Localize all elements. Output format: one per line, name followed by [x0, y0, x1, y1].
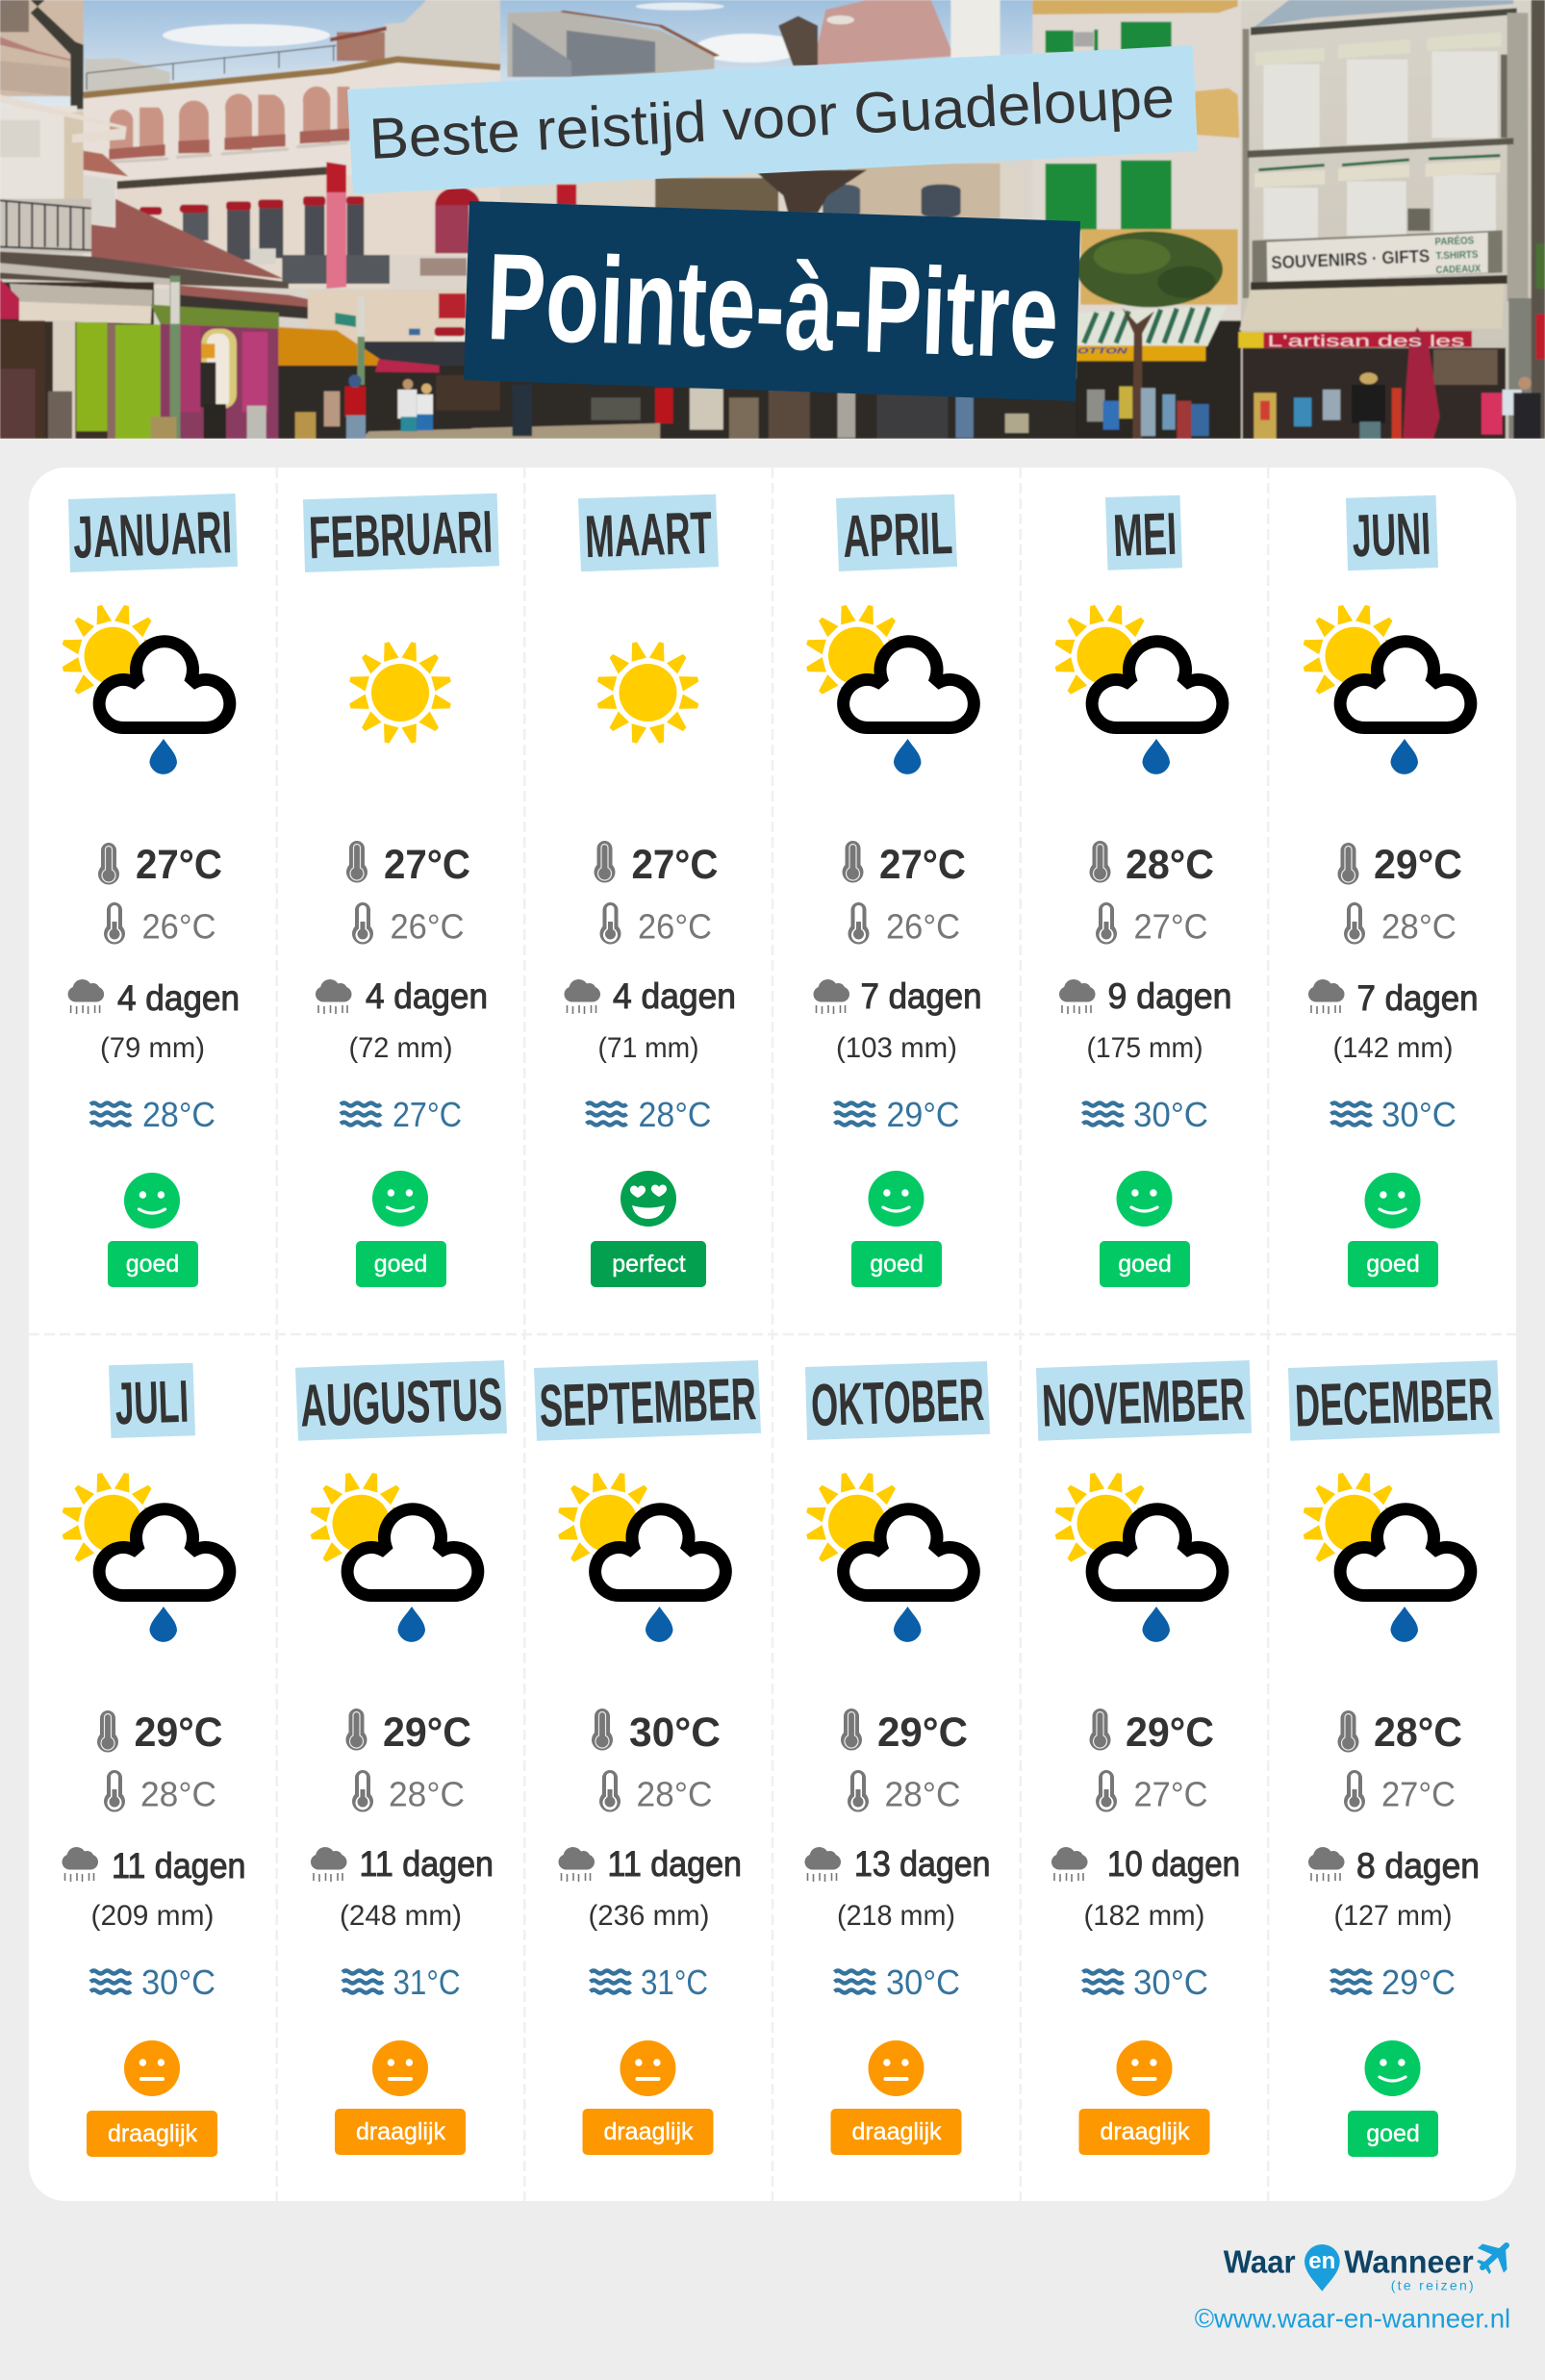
header photo: street of Pointe-à-Pitre [0, 0, 1545, 439]
sea temperature: 27°C [393, 1095, 462, 1134]
month label: AUGUSTUS [299, 1366, 503, 1440]
weather icon: sun, cloud and rain [61, 603, 230, 774]
minimum temperature [1096, 1770, 1208, 1814]
maximum temperature [595, 841, 718, 888]
month label: SEPTEMBER [539, 1366, 757, 1440]
month: Mei [1053, 495, 1231, 1287]
rainy days: 4 dagen [613, 976, 736, 1016]
month: September [534, 1360, 761, 2155]
header photo: street of Pointe-à-Pitre: T.SHIRTS [1435, 249, 1479, 262]
rating face [124, 2040, 180, 2096]
minimum temperature: 27°C [1133, 906, 1208, 947]
sea temperature [90, 1962, 215, 2002]
maximum temperature: 27°C [631, 842, 718, 888]
minimum temperature [1344, 902, 1456, 947]
rating badge [1348, 1241, 1438, 1287]
sea temperature [90, 1095, 215, 1134]
rating badge [831, 2109, 962, 2155]
rainy days [68, 978, 240, 1018]
rating face [621, 1171, 676, 1227]
sea temperature: 28°C [142, 1095, 215, 1134]
minimum temperature: 26°C [886, 906, 960, 947]
rainy days: 11 dagen [608, 1844, 742, 1884]
rating face [1364, 1173, 1420, 1228]
maximum temperature [97, 1709, 223, 1756]
sea temperature: 31°C [641, 1962, 708, 2002]
rainy days [564, 976, 736, 1016]
minimum temperature: 26°C [142, 906, 215, 947]
sea temperature [835, 1962, 960, 2002]
rainfall: (71 mm) [598, 1032, 698, 1064]
maximum temperature: 27°C [384, 842, 470, 888]
maximum temperature: 29°C [1374, 842, 1462, 888]
rating badge [335, 2109, 466, 2155]
website credit: ©www.waar-en-wanneer.nl [1195, 2303, 1510, 2333]
rainfall: (127 mm) [1333, 1900, 1453, 1932]
rating face [868, 1171, 924, 1227]
month label: FEBRUARI [308, 499, 494, 571]
sea temperature [1083, 1962, 1208, 2002]
sea temperature: 30°C [1381, 1095, 1456, 1134]
weather icon: sun, cloud and rain [61, 1471, 230, 1642]
rainy days [1308, 978, 1478, 1018]
rating badge: goed [1366, 1251, 1420, 1278]
rating badge: perfect [612, 1251, 686, 1278]
maximum temperature [346, 841, 470, 888]
rainy days: 11 dagen [360, 1844, 494, 1884]
month label [578, 494, 719, 571]
rainfall: (209 mm) [90, 1900, 214, 1932]
logo: Waar en Wanneer (te reizen): (te reizen) [1391, 2278, 1474, 2293]
month label: JUNI [1352, 501, 1431, 570]
month label [68, 494, 238, 572]
sea temperature [1083, 1095, 1208, 1134]
sea temperature: 30°C [141, 1962, 215, 2002]
rating badge [1348, 2111, 1438, 2157]
minimum temperature [352, 902, 464, 947]
month: November [1036, 1360, 1252, 2155]
month label: APRIL [842, 500, 953, 570]
month label: JANUARI [72, 499, 233, 571]
minimum temperature: 27°C [1381, 1774, 1456, 1814]
month label [836, 494, 957, 571]
weather icon: sun, cloud and rain [1302, 1471, 1471, 1642]
weather icon: sun, cloud and rain [557, 1471, 725, 1642]
rating badge [583, 2109, 714, 2155]
minimum temperature [1344, 1770, 1456, 1814]
rainy days [1051, 1844, 1240, 1884]
title strip: Beste reistijd voor Guadeloupe [347, 45, 1198, 194]
maximum temperature: 27°C [879, 842, 966, 888]
month label [295, 1360, 507, 1441]
title strip: Pointe-à-Pitre [464, 201, 1080, 401]
rating face [620, 2040, 675, 2096]
rating badge: draaglijk [108, 2120, 198, 2147]
rating badge: goed [870, 1251, 924, 1278]
month label [1036, 1360, 1252, 1441]
weather icon: sun, cloud and rain [309, 1471, 478, 1642]
rainy days: 13 dagen [854, 1844, 991, 1884]
minimum temperature: 28°C [885, 1774, 960, 1814]
logo: Waar en Wanneer (te reizen): Waar [1224, 2244, 1296, 2280]
month: Juni [1302, 495, 1478, 1287]
maximum temperature: 27°C [136, 842, 222, 888]
maximum temperature [1089, 1709, 1214, 1756]
sea temperature: 30°C [1133, 1095, 1208, 1134]
rating face [124, 1173, 180, 1228]
minimum temperature [1096, 902, 1208, 947]
rating badge [356, 1241, 446, 1287]
header photo: street of Pointe-à-Pitre: CADEAUX [1435, 263, 1482, 276]
rainy days [804, 1844, 991, 1884]
month: Januari [61, 494, 240, 1287]
header photo: street of Pointe-à-Pitre: PARÉOS [1434, 234, 1474, 248]
sea temperature [835, 1095, 960, 1134]
rainy days: 7 dagen [860, 976, 981, 1016]
rating face [372, 2040, 428, 2096]
weather icon: sun, cloud and rain [1053, 1471, 1223, 1642]
month label [303, 494, 499, 572]
sea temperature: 29°C [887, 1095, 960, 1134]
weather icon: sun [348, 641, 452, 745]
minimum temperature [104, 1770, 216, 1814]
rainy days: 11 dagen [112, 1846, 246, 1886]
maximum temperature: 29°C [135, 1709, 223, 1756]
rating badge: goed [1118, 1251, 1172, 1278]
rating badge: draaglijk [1100, 2118, 1190, 2145]
sea temperature [341, 1095, 462, 1134]
month: April [805, 494, 981, 1287]
rainfall: (142 mm) [1333, 1032, 1453, 1064]
rainfall: (79 mm) [100, 1032, 205, 1064]
maximum temperature: 28°C [1374, 1709, 1462, 1756]
logo: Waar en Wanneer (te reizen): en [1308, 2248, 1335, 2274]
rainy days: 7 dagen [1356, 978, 1478, 1018]
rainy days: 9 dagen [1108, 976, 1231, 1016]
maximum temperature [592, 1709, 721, 1756]
rating badge: goed [374, 1251, 427, 1278]
sea temperature: 28°C [639, 1095, 712, 1134]
sea temperature [342, 1962, 460, 2002]
maximum temperature: 29°C [1126, 1709, 1214, 1756]
month label [805, 1361, 990, 1440]
maximum temperature: 29°C [383, 1709, 471, 1756]
minimum temperature: 28°C [389, 1774, 465, 1814]
maximum temperature [346, 1709, 471, 1756]
rainfall: (236 mm) [589, 1900, 710, 1932]
minimum temperature [600, 902, 712, 947]
month label [109, 1363, 195, 1438]
maximum temperature [841, 1709, 968, 1756]
rainy days: 10 dagen [1107, 1844, 1240, 1884]
rainy days [1308, 1846, 1480, 1886]
month label [534, 1360, 761, 1441]
month label [1105, 495, 1182, 570]
rainy days [558, 1844, 742, 1884]
rating badge: draaglijk [851, 2118, 942, 2145]
weather icon: sun, cloud and rain [1053, 603, 1223, 774]
rating face [1116, 1171, 1172, 1227]
rating badge: goed [1366, 2120, 1420, 2147]
minimum temperature: 26°C [638, 906, 712, 947]
month: Februari [303, 494, 499, 1287]
rainy days [814, 976, 981, 1016]
rating badge: goed [126, 1251, 179, 1278]
sea temperature: 30°C [886, 1962, 960, 2002]
minimum temperature [599, 1770, 712, 1814]
weather icon: sun, cloud and rain [805, 1471, 974, 1642]
month: December [1288, 1360, 1500, 2157]
minimum temperature: 28°C [637, 1774, 712, 1814]
sea temperature: 31°C [393, 1962, 460, 2002]
weather icon: sun, cloud and rain [805, 603, 974, 774]
minimum temperature: 26°C [391, 906, 464, 947]
maximum temperature: 30°C [629, 1709, 721, 1756]
rainy days [316, 976, 488, 1016]
sea temperature [587, 1095, 712, 1134]
month label: JULI [114, 1369, 190, 1437]
minimum temperature [104, 902, 215, 947]
logo: Waar en Wanneer (te reizen) [1224, 2243, 1507, 2293]
sea temperature [1331, 1095, 1456, 1134]
rainy days [62, 1846, 246, 1886]
rainy days [311, 1844, 494, 1884]
rainfall: (218 mm) [837, 1900, 955, 1932]
maximum temperature [98, 842, 222, 888]
maximum temperature: 29°C [877, 1709, 968, 1756]
maximum temperature: 28°C [1126, 842, 1214, 888]
month label: MEI [1112, 501, 1178, 570]
header photo: street of Pointe-à-Pitre: SOUVENIRS · GIFTS [1271, 245, 1431, 272]
month label: OKTOBER [810, 1367, 985, 1439]
minimum temperature [848, 1770, 960, 1814]
rating badge: draaglijk [603, 2118, 694, 2145]
month label: MAART [584, 500, 713, 570]
month: Augustus [295, 1360, 507, 2155]
sea temperature [591, 1962, 708, 2002]
rating face [1364, 2040, 1420, 2096]
minimum temperature: 28°C [1381, 906, 1456, 947]
rainy days: 4 dagen [366, 976, 488, 1016]
month label [1346, 495, 1438, 570]
month label: NOVEMBER [1041, 1366, 1246, 1440]
sea temperature: 30°C [1133, 1962, 1208, 2002]
weather icon: sun [595, 641, 700, 745]
rainfall: (248 mm) [340, 1900, 462, 1932]
title strip: Beste reistijd voor Guadeloupe: Beste reistijd voor Guadeloupe [367, 64, 1177, 171]
header photo: street of Pointe-à-Pitre: L'artisan des les [1267, 332, 1464, 350]
rainfall: (182 mm) [1083, 1900, 1204, 1932]
rating badge [108, 1241, 198, 1287]
minimum temperature [848, 902, 960, 947]
minimum temperature: 28°C [140, 1774, 216, 1814]
rainfall: (72 mm) [348, 1032, 452, 1064]
rating badge [591, 1241, 706, 1287]
sea temperature: 29°C [1381, 1962, 1456, 2002]
rating badge: draaglijk [356, 2118, 446, 2145]
month: Maart [564, 494, 736, 1287]
rating badge [851, 1241, 942, 1287]
rating badge [1079, 2109, 1210, 2155]
sea temperature [1331, 1962, 1456, 2002]
maximum temperature [1089, 841, 1214, 888]
title strip: Pointe-à-Pitre: Pointe-à-Pitre [485, 228, 1061, 385]
rating face [1116, 2040, 1172, 2096]
logo: Waar en Wanneer (te reizen): Wanneer [1344, 2244, 1474, 2280]
maximum temperature [843, 841, 966, 888]
weather icon: sun, cloud and rain [1302, 603, 1471, 774]
rainfall: (175 mm) [1087, 1032, 1203, 1064]
minimum temperature: 27°C [1133, 1774, 1208, 1814]
maximum temperature [1337, 842, 1462, 888]
rainy days: 8 dagen [1356, 1846, 1480, 1886]
maximum temperature [1337, 1709, 1462, 1756]
rainy days: 4 dagen [117, 978, 240, 1018]
header photo: street of Pointe-à-Pitre: OTTON [1077, 345, 1128, 355]
rating badge [87, 2111, 217, 2157]
panel: climate table card [29, 468, 1516, 2201]
rating badge [1100, 1241, 1190, 1287]
rating face [868, 2040, 924, 2096]
rating face [372, 1171, 428, 1227]
rainfall: (103 mm) [836, 1032, 957, 1064]
month: Oktober [804, 1361, 991, 2155]
month: Juli [61, 1363, 245, 2157]
minimum temperature [352, 1770, 465, 1814]
